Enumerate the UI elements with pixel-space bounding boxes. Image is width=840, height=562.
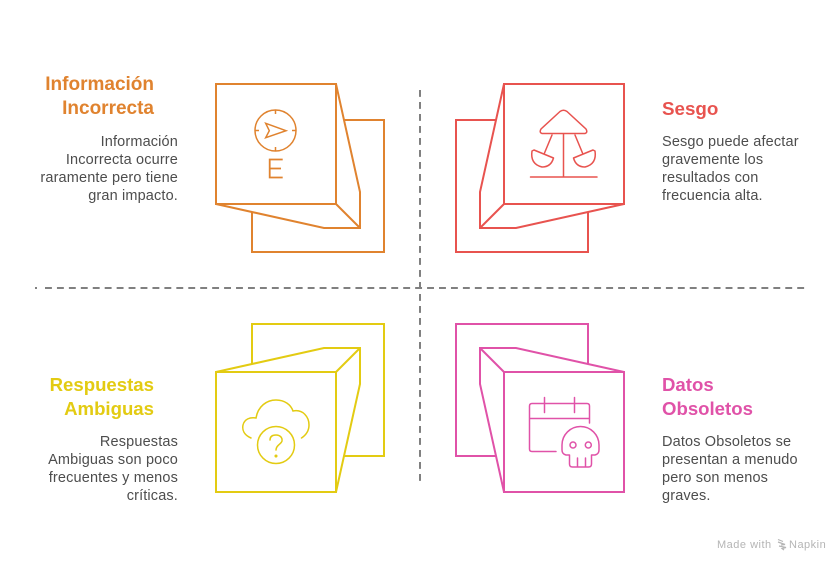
heading: Respuestas Ambiguas: Ambiguas: [64, 398, 154, 419]
text: Datos Obsoletos description: presentan a menudo: [662, 452, 798, 468]
icon: calendar with skull: [530, 398, 599, 467]
text: Sesgo description: frecuencia alta.: [662, 188, 763, 204]
heading: Información Incorrecta: Incorrecta: [62, 98, 154, 119]
icon: carousel: [530, 110, 597, 177]
heading: Respuestas Ambiguas: [50, 374, 154, 419]
text: Sesgo description: resultados con: [662, 170, 758, 186]
text: Datos Obsoletos description: Datos Obsoletos se: [662, 434, 791, 450]
icon: compass: [255, 110, 296, 178]
text: Datos Obsoletos description: graves.: [662, 488, 711, 504]
text: Información Incorrecta description: raramente pero tiene: [40, 170, 178, 186]
footer: Made with Napkin: [717, 539, 826, 551]
text: Datos Obsoletos description: [662, 434, 798, 504]
text: Sesgo description: gravemente los: [662, 152, 763, 168]
text: Respuestas Ambiguas description: frecuentes y menos: [49, 470, 178, 486]
graphic: red box with carousel icon: [456, 84, 624, 252]
text: Respuestas Ambiguas description: Respuestas: [100, 434, 178, 450]
text: Información Incorrecta description: Incorrecta ocurre: [66, 152, 178, 168]
graphic: orange box with compass icon: [216, 84, 384, 252]
text: Sesgo description: [662, 134, 799, 204]
footer: Made with Napkin: Napkin: [789, 539, 826, 551]
heading: Información Incorrecta: [45, 74, 154, 119]
text: Información Incorrecta description: [40, 134, 178, 204]
text: Información Incorrecta description: gran impacto.: [88, 188, 178, 204]
text: Sesgo description: Sesgo puede afectar: [662, 134, 799, 150]
icon: cloud with question mark: [243, 400, 309, 464]
text: Información Incorrecta description: Información: [101, 134, 178, 150]
heading: Datos Obsoletos: [662, 374, 753, 419]
heading: Información Incorrecta: Información: [45, 74, 154, 95]
heading: Sesgo: Sesgo: [662, 98, 718, 119]
graphic: pink box with calendar skull icon: [456, 324, 624, 492]
text: Datos Obsoletos description: pero son menos: [662, 470, 768, 486]
text: Respuestas Ambiguas description: críticas.: [127, 488, 178, 504]
text: Respuestas Ambiguas description: Ambiguas son poco: [48, 452, 178, 468]
graphic: yellow box with cloud question icon: [216, 324, 384, 492]
footer: Made with Napkin: Made with: [717, 539, 772, 551]
heading: Datos Obsoletos: Datos: [662, 374, 714, 395]
heading: Respuestas Ambiguas: Respuestas: [50, 374, 154, 395]
text: Respuestas Ambiguas description: [48, 434, 178, 504]
heading: Datos Obsoletos: Obsoletos: [662, 398, 753, 419]
